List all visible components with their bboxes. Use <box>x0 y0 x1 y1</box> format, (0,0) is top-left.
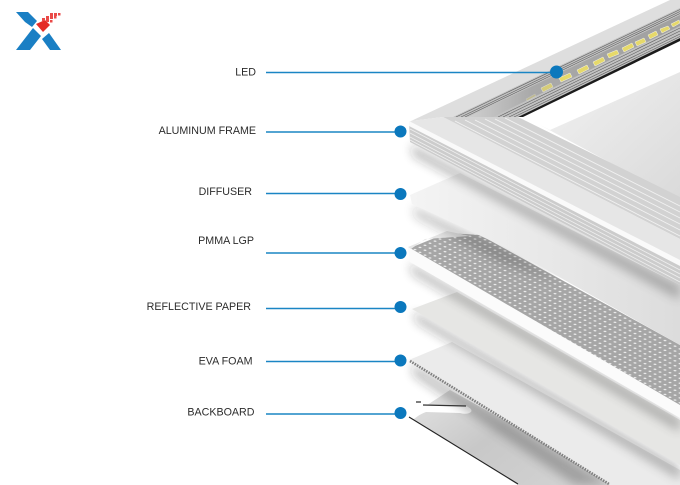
LED bed <box>468 15 680 117</box>
callout: backboard <box>187 406 406 419</box>
callout: EVA foam: EVA FOAM <box>199 356 253 368</box>
layer: PMMA LGP <box>408 231 680 432</box>
callout: LED: LED <box>235 66 256 78</box>
callout: diffuser <box>199 186 406 200</box>
layer: reflective paper <box>412 292 680 480</box>
callout: aluminum frame: ALUMINUM FRAME <box>159 125 256 137</box>
callout: PMMA LGP <box>198 235 406 259</box>
callout: diffuser: DIFFUSER <box>199 186 252 198</box>
LED chips <box>526 20 680 101</box>
frame flat band <box>409 117 680 262</box>
backboard edge <box>409 417 518 484</box>
channel black edge <box>518 38 680 117</box>
logo <box>16 12 61 50</box>
callout: reflective paper: REFLECTIVE PAPER <box>147 301 251 313</box>
LED channel <box>453 8 680 117</box>
frame front top ridges <box>443 117 680 239</box>
frame back top face <box>411 0 680 121</box>
layer: backboard <box>407 390 620 485</box>
exploded LED panel layers <box>407 0 680 485</box>
callout: LED <box>235 66 563 78</box>
callout: PMMA LGP: PMMA LGP <box>198 235 254 247</box>
layer: aluminum frame with LED strip <box>409 0 680 300</box>
callout: EVA foam <box>199 354 406 368</box>
callout: aluminum frame <box>159 125 406 138</box>
callout: reflective paper <box>147 301 406 313</box>
layer: EVA foam <box>409 342 680 485</box>
backboard slit <box>410 406 472 419</box>
window panel inside frame <box>540 72 680 200</box>
layer: diffuser <box>410 173 680 345</box>
frame outer face <box>409 122 680 285</box>
callout: backboard: BACKBOARD <box>187 406 255 418</box>
